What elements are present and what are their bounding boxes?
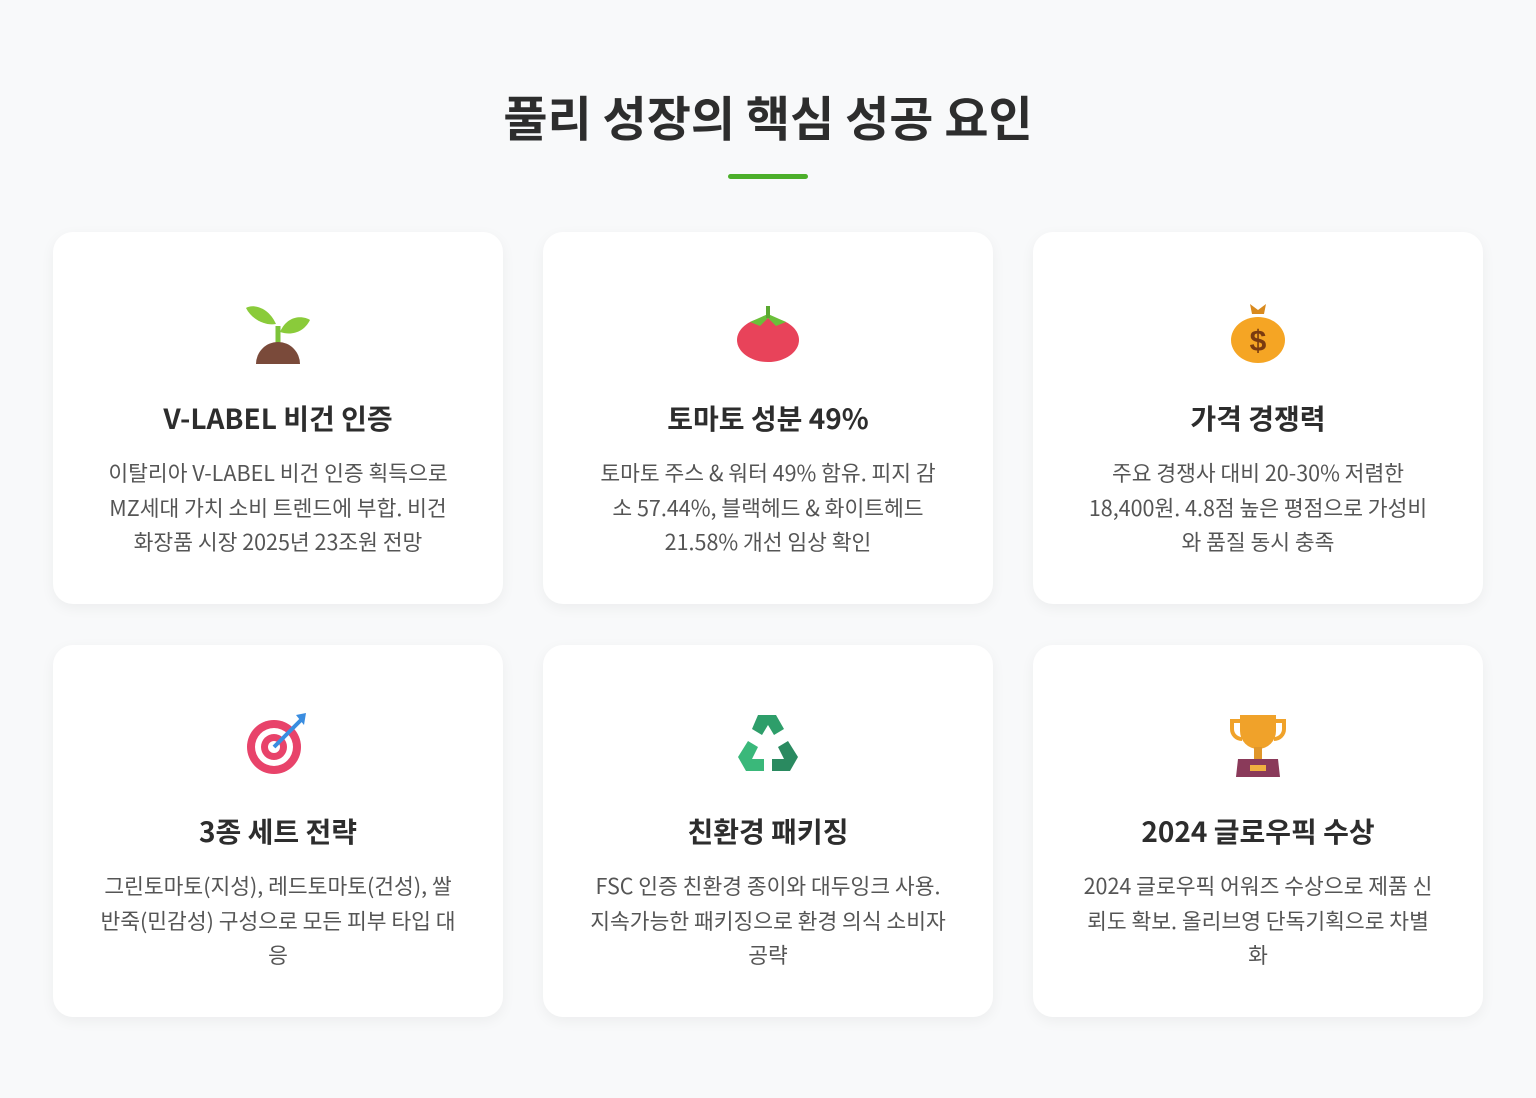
description: 소 57.44%, 블랙헤드 & 화이트헤드	[612, 492, 924, 522]
description: 토마토 주스 & 워터 49% 함유. 피지 감	[600, 457, 936, 488]
description	[1084, 870, 1432, 970]
title: 풀리 성장의 핵심 성공 요인	[503, 80, 1033, 150]
icon: money bag	[1231, 304, 1285, 363]
description: 21.58% 개선 임상 확인	[665, 526, 871, 557]
description: 2024 글로우픽 어워즈 수상으로 제품 신	[1084, 870, 1432, 901]
icon: target	[247, 713, 306, 774]
card: tomato	[543, 232, 993, 604]
heading: V-LABEL 비건 인증	[163, 398, 393, 438]
heading: 3종 세트 전략	[199, 811, 357, 851]
description	[108, 457, 448, 557]
description: 화장품 시장 2025년 23조원 전망	[134, 526, 422, 557]
description: FSC 인증 친환경 종이와 대두잉크 사용.	[596, 870, 940, 901]
description: 화	[1248, 939, 1268, 970]
description	[100, 870, 456, 970]
description: 주요 경쟁사 대비 20-30% 저렴한	[1112, 457, 1404, 488]
description: 이탈리아 V-LABEL 비건 인증 획득으로	[108, 457, 448, 488]
description: 공략	[748, 939, 788, 970]
description: 그린토마토(지성), 레드토마토(건성), 쌀	[104, 870, 452, 901]
card: set strategy	[53, 645, 503, 1017]
description: 지속가능한 패키징으로 환경 의식 소비자	[590, 904, 946, 936]
card: V-LABEL	[53, 232, 503, 604]
description: 응	[268, 939, 288, 970]
icon: recycle	[738, 715, 798, 771]
description: 와 품질 동시 충족	[1182, 526, 1334, 557]
description: 18,400원. 4.8점 높은 평점으로 가성비	[1089, 492, 1427, 522]
description: 뢰도 확보. 올리브영 단독기획으로 차별	[1087, 904, 1429, 936]
icon: sprout	[246, 306, 310, 364]
card: award	[1033, 645, 1483, 1017]
icon: money bag: $	[1250, 325, 1267, 358]
card: price	[1033, 232, 1483, 604]
description: MZ세대 가치 소비 트렌드에 부합. 비건	[109, 492, 447, 522]
heading: 친환경 패키징	[688, 811, 848, 851]
description	[590, 870, 946, 970]
description: 반죽(민감성) 구성으로 모든 피부 타입 대	[100, 904, 456, 936]
card: packaging	[543, 645, 993, 1017]
heading: 가격 경쟁력	[1190, 398, 1326, 438]
heading: 2024 글로우픽 수상	[1141, 811, 1375, 851]
icon: trophy	[1230, 715, 1286, 777]
description	[1089, 457, 1427, 557]
icon: tomato	[737, 306, 799, 362]
description	[600, 457, 936, 557]
heading: 토마토 성분 49%	[667, 398, 869, 438]
